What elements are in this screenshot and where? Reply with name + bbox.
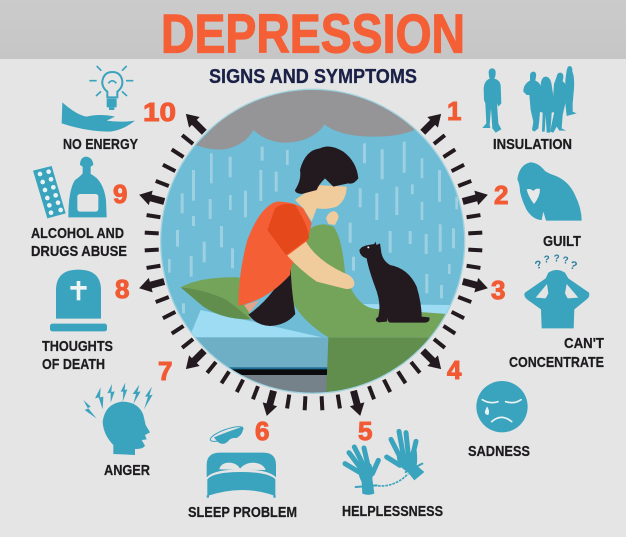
- item 6: sleep problem: [188, 416, 297, 521]
- icon: light bulb over hand: [62, 66, 135, 132]
- icon: person with question marks: [524, 253, 589, 328]
- rain streaks: [168, 142, 458, 313]
- icon: chained hands: [345, 431, 424, 495]
- subtitle: SIGNS AND SYMPTOMS: [209, 65, 417, 88]
- icon: group of people: [523, 66, 577, 133]
- icon: person with question marks: ?: [554, 253, 560, 264]
- item 9: alcohol and drugs abuse: DRUGS ABUSE: [31, 243, 127, 260]
- item 3: can't concentrate: CAN'T: [564, 335, 604, 352]
- clock ring of ticks: [145, 134, 482, 410]
- item 4: sadness: [447, 355, 530, 460]
- item 4: sadness: SADNESS: [468, 443, 530, 460]
- item 9: alcohol and drugs abuse: 9: [113, 179, 127, 209]
- arrows: [137, 109, 490, 418]
- item 4: sadness: 4: [447, 355, 462, 385]
- icon: person holding head: [517, 162, 582, 221]
- central illustration: [160, 87, 467, 400]
- item 1: insulation: INSULATION: [493, 136, 572, 153]
- boy: [238, 146, 358, 326]
- item 2: guilt: [494, 162, 582, 250]
- item 6: sleep problem: SLEEP PROBLEM: [188, 504, 297, 521]
- item 8: thoughts of death: [42, 270, 129, 373]
- item 8: thoughts of death: THOUGHTS: [42, 338, 113, 355]
- icon: sad face: [476, 381, 528, 432]
- icon: person with question marks: ?: [568, 259, 579, 273]
- icon: head with lightning bolts: [83, 383, 153, 455]
- item 2: guilt: 2: [494, 180, 508, 210]
- blanket: [290, 224, 447, 400]
- item 1: insulation: 1: [447, 96, 461, 126]
- icon: pills and bottle: [33, 157, 107, 218]
- icon: sleep mask and bed: [207, 424, 276, 498]
- item 3: can't concentrate: CONCENTRATE: [509, 354, 604, 371]
- mattress: [187, 304, 450, 398]
- icon: lone figure: [482, 68, 501, 133]
- cat: [359, 242, 430, 323]
- item 5: helplessness: 5: [358, 416, 372, 446]
- icon: person with question marks: ?: [544, 255, 550, 266]
- icon: person with question marks: ?: [533, 259, 544, 272]
- item 9: alcohol and drugs abuse: [31, 157, 127, 260]
- pillow: [181, 277, 251, 319]
- item 10: no energy: [62, 66, 176, 153]
- icon: person with question marks: ?: [563, 255, 569, 266]
- item 2: guilt: GUILT: [543, 233, 581, 250]
- item 5: helplessness: [342, 416, 443, 520]
- item 10: no energy: 10: [143, 97, 176, 127]
- rainy background: [160, 90, 467, 397]
- item 3: can't concentrate: 3: [491, 275, 505, 305]
- title: DEPRESSION: [161, 4, 465, 64]
- item 9: alcohol and drugs abuse: ALCOHOL AND: [31, 225, 124, 242]
- item 3: can't concentrate: [491, 253, 604, 371]
- item 1: insulation: [447, 66, 577, 153]
- item 8: thoughts of death: 8: [115, 274, 129, 304]
- title band: [0, 0, 626, 59]
- icon: tombstone: [50, 270, 107, 331]
- storm cloud: [196, 87, 416, 150]
- item 10: no energy: NO ENERGY: [63, 136, 138, 153]
- item 7: anger: 7: [158, 356, 172, 386]
- item 5: helplessness: HELPLESSNESS: [342, 503, 443, 520]
- item 6: sleep problem: 6: [255, 416, 269, 446]
- item 8: thoughts of death: OF DEATH: [42, 356, 105, 373]
- item 7: anger: [83, 356, 172, 479]
- item 7: anger: ANGER: [104, 462, 150, 479]
